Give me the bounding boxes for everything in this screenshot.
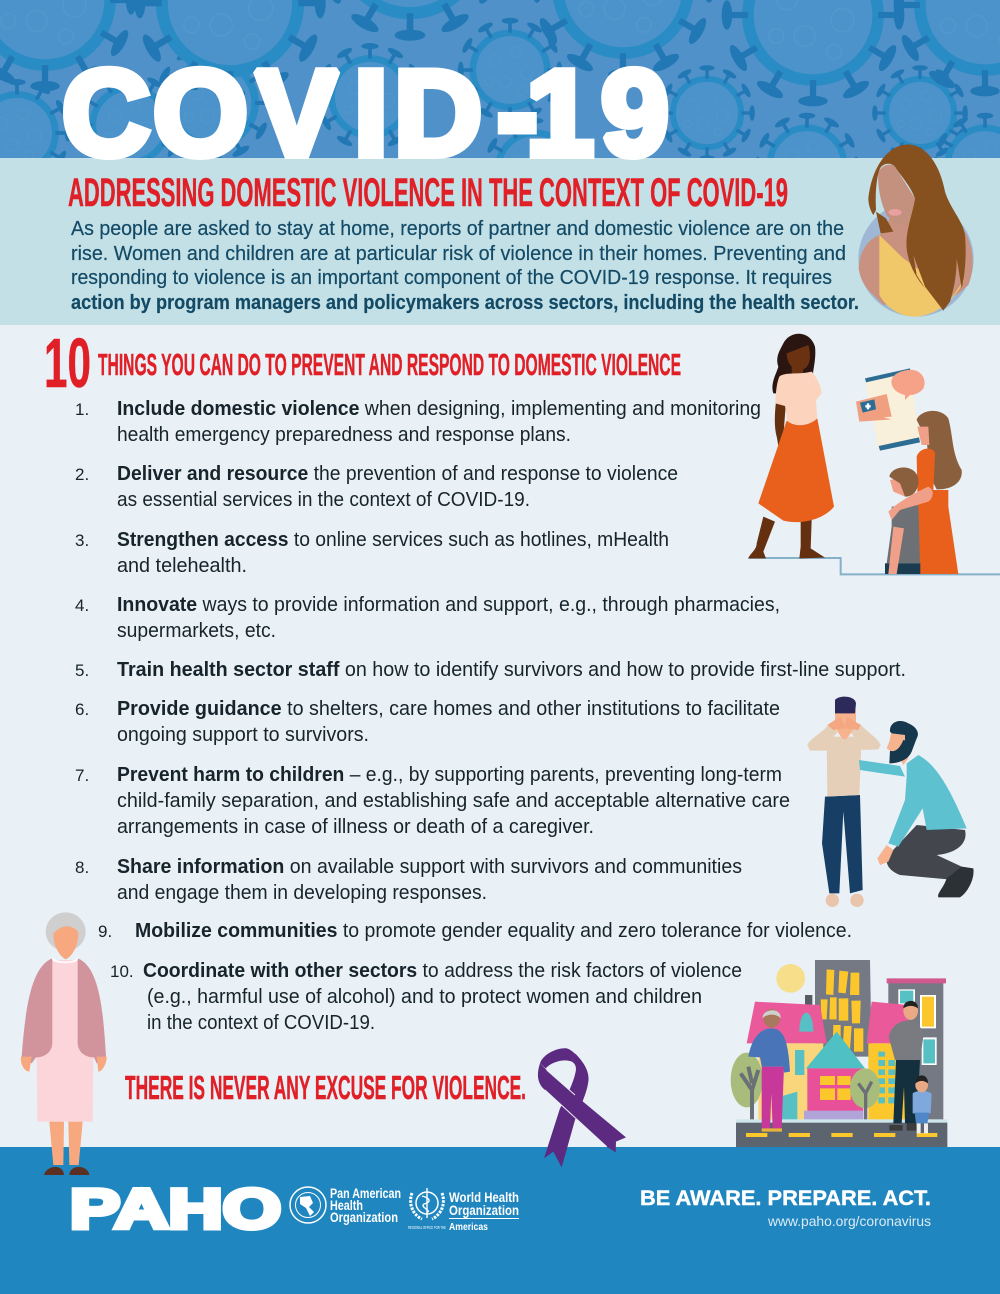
illustration: man comforting another man xyxy=(807,697,974,907)
logo: PAHO globe emblem xyxy=(290,1187,326,1223)
list item 4: 4. xyxy=(75,596,89,615)
list item 2: 2. xyxy=(75,465,89,484)
list item 10: (e.g., harmful use of alcohol) and to protect women and children xyxy=(147,986,702,1008)
big number 10: 10 xyxy=(44,324,91,402)
logo text: World Health Organization Americas xyxy=(408,1190,519,1233)
logo: WHO emblem xyxy=(411,1188,443,1219)
list item 7: Prevent harm to children – e.g., by supporting parents, preventing long-term xyxy=(117,764,782,786)
list item 10: 10. xyxy=(110,962,134,981)
list item 7 xyxy=(75,764,790,838)
list item 6: ongoing support to survivors. xyxy=(117,724,369,746)
list item 1: Include domestic violence when designing, implementing and monitoring xyxy=(117,398,761,420)
header banner with virus pattern xyxy=(0,0,1000,222)
list item 3 xyxy=(75,529,669,577)
list item 6: Provide guidance to shelters, care homes and other institutions to facilitate xyxy=(117,698,780,720)
logo text: World Health Organization Americas: Americas xyxy=(449,1221,488,1233)
illustration: woman on stairs, mother and child with phone xyxy=(748,334,1000,574)
list item 7: arrangements in case of illness or death of a caregiver. xyxy=(117,816,594,838)
list item 6: 6. xyxy=(75,700,89,719)
illustration: community street with houses and people xyxy=(731,960,947,1149)
list item 10: in the context of COVID-19. xyxy=(147,1012,375,1034)
intro band background xyxy=(0,158,1000,325)
list item 8: and engage them in developing responses. xyxy=(117,882,487,904)
list item 3: and telehealth. xyxy=(117,555,247,577)
list item 3: Strengthen access to online services such as hotlines, mHealth xyxy=(117,529,669,551)
list item 6 xyxy=(75,698,780,746)
list item 4: Innovate ways to provide information and support, e.g., through pharmacies, xyxy=(117,594,780,616)
intro paragraph xyxy=(71,217,859,314)
list item 10: Coordinate with other sectors to address the risk factors of violence xyxy=(143,960,742,982)
illustration: elderly woman xyxy=(21,912,107,1175)
icon: purple ribbon xyxy=(538,1048,626,1167)
callout: there is never any excuse for violence: THERE IS NEVER ANY EXCUSE FOR VIOLENCE. xyxy=(125,1069,526,1106)
logo text: Pan American Health Organization: Organization xyxy=(330,1210,398,1225)
list item 3: 3. xyxy=(75,531,89,550)
logo text: World Health Organization Americas: REGIONAL OFFICE FOR THE xyxy=(408,1225,446,1230)
list item 2: Deliver and resource the prevention of and response to violence xyxy=(117,463,678,485)
intro paragraph: rise. Women and children are at particular risk of violence in their homes. Preventing and xyxy=(71,242,846,265)
list item 2 xyxy=(75,463,678,511)
list item 9: Mobilize communities to promote gender equality and zero tolerance for violence. xyxy=(135,920,852,942)
list item 10 xyxy=(110,960,742,1034)
website url: www.paho.org/coronavirus xyxy=(767,1213,931,1229)
list item 7: 7. xyxy=(75,766,89,785)
list item 4: supermarkets, etc. xyxy=(117,620,276,642)
list item 1: 1. xyxy=(75,400,89,419)
intro paragraph: As people are asked to stay at home, reports of partner and domestic violence are on the xyxy=(71,217,844,240)
list item 2: as essential services in the context of COVID-19. xyxy=(117,489,530,511)
list item 4 xyxy=(75,594,780,642)
slogan: be aware prepare act: BE AWARE. PREPARE. ACT. xyxy=(640,1187,931,1210)
intro paragraph: action by program managers and policymakers across sectors, including the health sector. xyxy=(71,291,859,314)
list item 7: child-family separation, and establishing safe and acceptable alternative care xyxy=(117,790,790,812)
list item 1 xyxy=(75,398,761,446)
list item 5: Train health sector staff on how to identify survivors and how to provide first-line support. xyxy=(117,659,906,681)
title: COVID-19 xyxy=(62,45,669,181)
logo text: Pan American Health Organization xyxy=(330,1186,401,1225)
list item 8 xyxy=(75,856,742,904)
logo text: World Health Organization Americas: Organization xyxy=(449,1203,519,1218)
list item 1: health emergency preparedness and response plans. xyxy=(117,424,571,446)
list item 8: 8. xyxy=(75,858,89,877)
list item 5: 5. xyxy=(75,661,89,680)
list item 8: Share information on available support with survivors and communities xyxy=(117,856,742,878)
logo text: Pan American Health Organization: Pan American xyxy=(330,1186,401,1201)
illustration: woman with long hair in circle xyxy=(858,144,974,317)
logo text: World Health Organization Americas: World Health xyxy=(449,1190,519,1205)
logo: PAHO wordmark: PAHO xyxy=(70,1177,281,1240)
intro paragraph: responding to violence is an important component of the COVID-19 response. It requires xyxy=(71,266,832,289)
footer band xyxy=(0,1147,1000,1294)
list item 9: 9. xyxy=(98,922,112,941)
logo text: Pan American Health Organization: Health xyxy=(330,1198,363,1213)
